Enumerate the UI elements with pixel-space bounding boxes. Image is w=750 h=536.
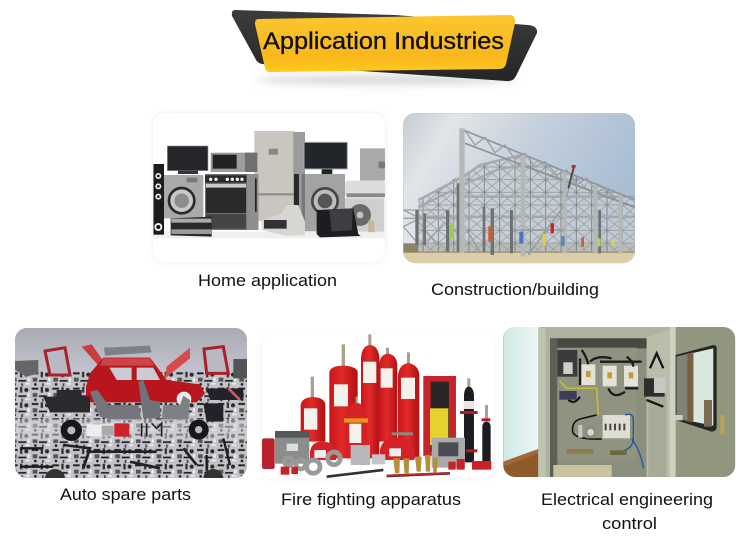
panel: construction building — [403, 113, 635, 264]
title text: Application Industries — [263, 28, 504, 55]
appliances photo — [153, 131, 385, 238]
fire extinguishers photo — [262, 334, 491, 477]
electrical cabinet photo — [503, 327, 735, 477]
electrical label second line: control — [602, 514, 657, 533]
steel frame photo — [403, 113, 635, 264]
home application label: Home application — [198, 271, 337, 290]
panel: home application — [153, 113, 385, 262]
panel: auto spare parts — [15, 328, 247, 489]
panel: electrical engineering control — [503, 327, 735, 477]
construction label: Construction/building — [431, 280, 599, 299]
panel: fire fighting apparatus — [262, 334, 494, 478]
title banner — [232, 10, 537, 85]
banner yellow front ribbon — [255, 15, 515, 72]
auto label: Auto spare parts — [60, 485, 191, 504]
electrical label: Electrical engineering — [541, 490, 713, 509]
banner dark back ribbon — [232, 10, 537, 81]
fire label: Fire fighting apparatus — [281, 490, 461, 509]
car parts photo — [15, 328, 247, 489]
